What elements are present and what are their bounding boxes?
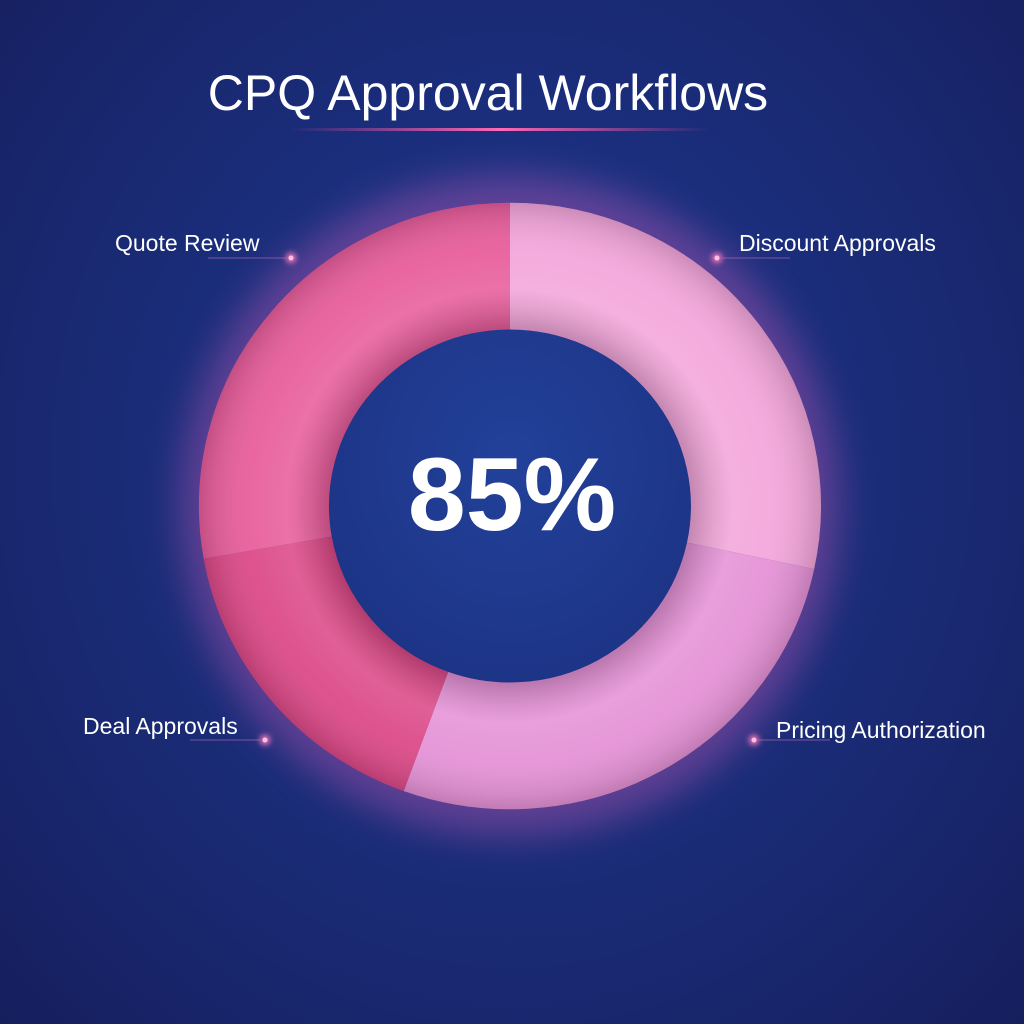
- label: Quote Review: Quote Review: [115, 230, 259, 256]
- title: CPQ Approval Workflows: [208, 65, 768, 121]
- title underline: [290, 128, 710, 131]
- segment: deal approvals: [268, 548, 426, 731]
- label: Deal Approvals: Deal Approvals: [83, 713, 238, 739]
- label: Pricing Authorization: Pricing Authorization: [776, 717, 986, 743]
- center value: 85%: [408, 437, 616, 553]
- segment: pricing authorization: [426, 556, 751, 746]
- segment: discount approvals: [510, 266, 756, 556]
- segment: quote review: [264, 266, 510, 548]
- label: Discount Approvals: Discount Approvals: [739, 230, 936, 256]
